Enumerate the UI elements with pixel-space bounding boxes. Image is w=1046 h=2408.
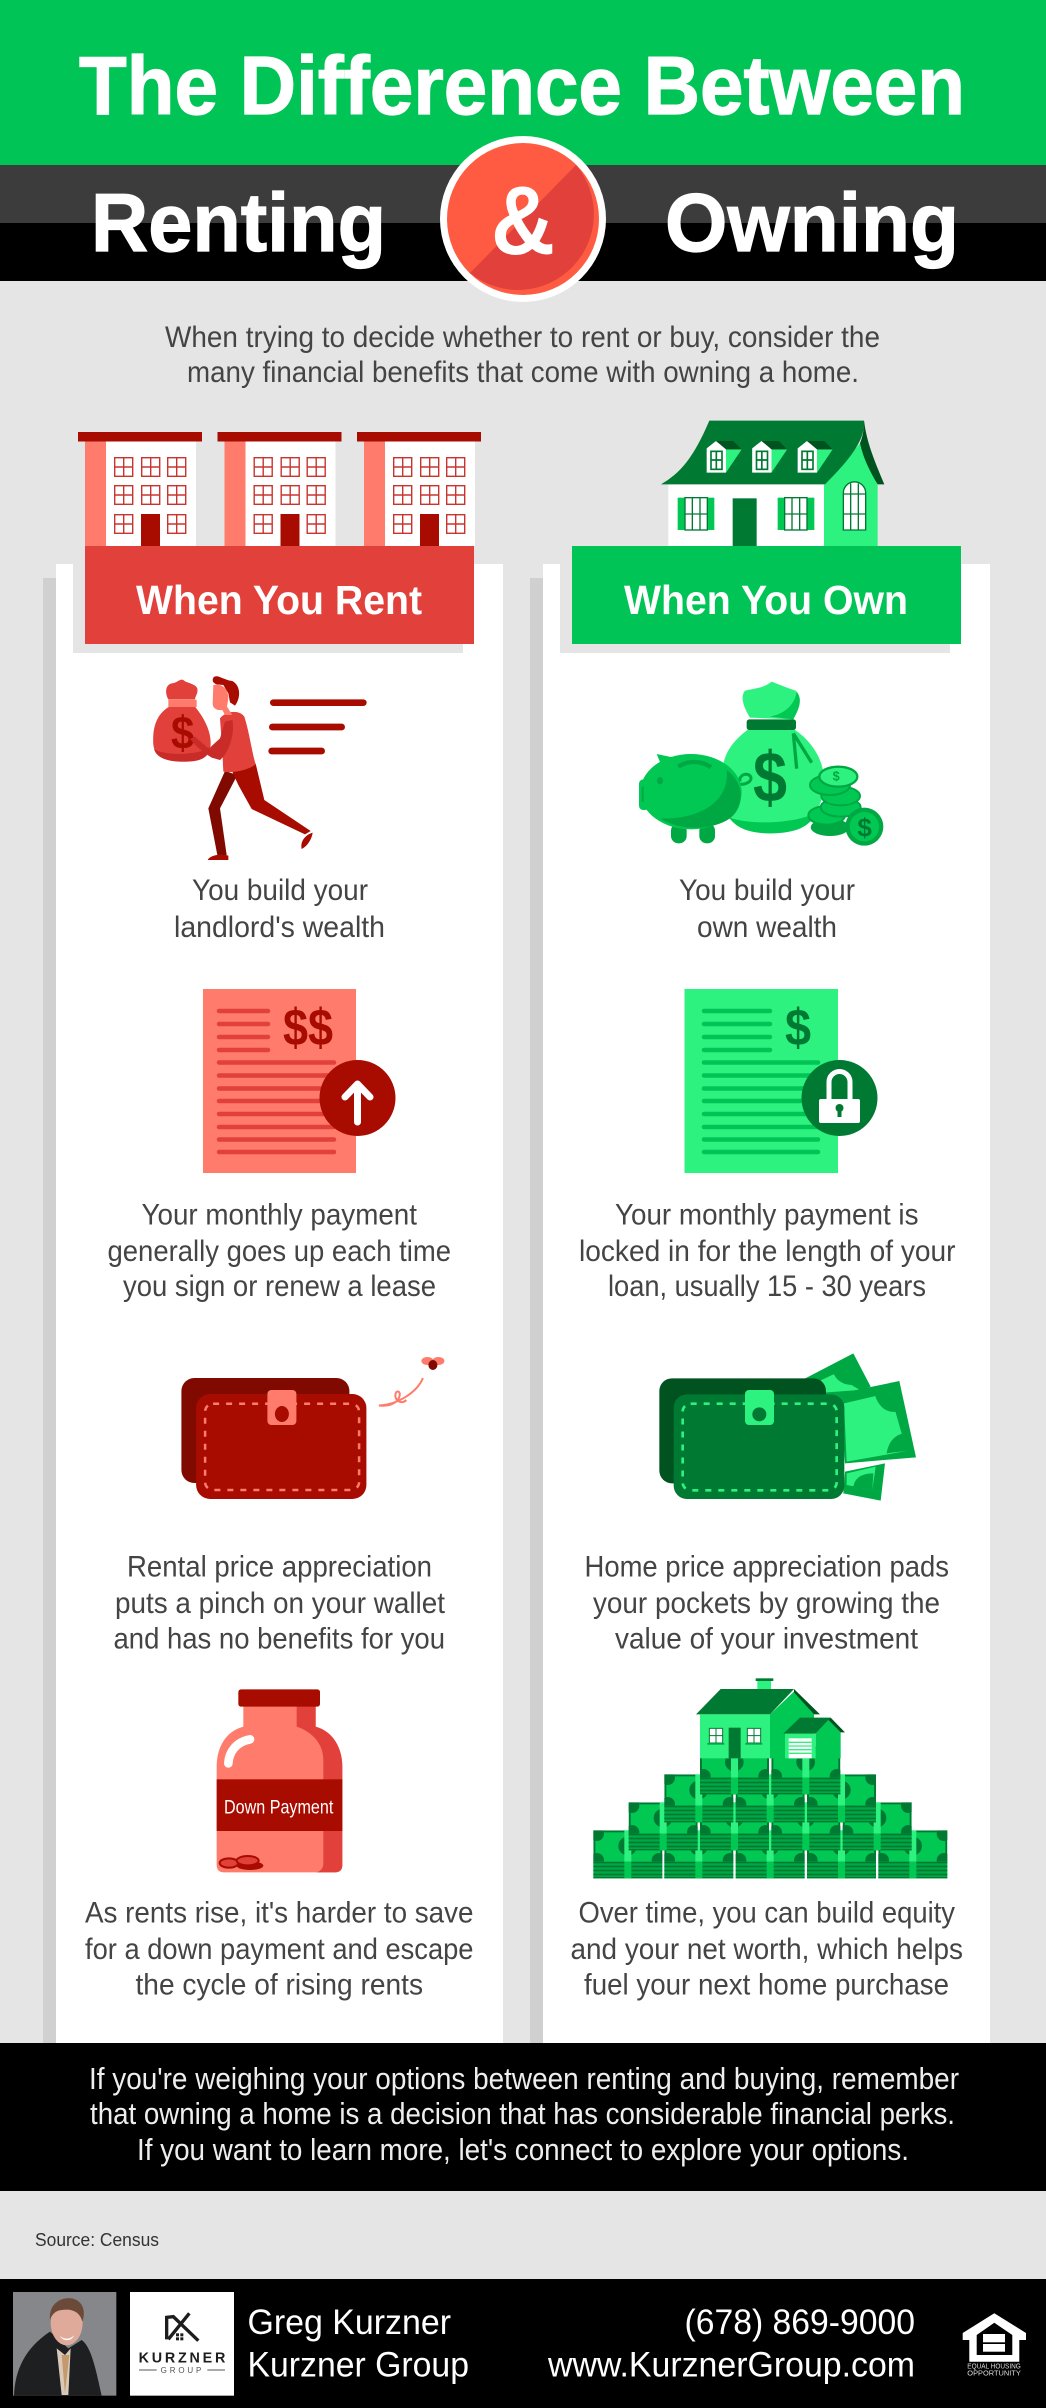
text: you build your landlord's wealth: landlord's wealth xyxy=(174,911,385,944)
ampersand badge: & xyxy=(491,166,555,275)
icon: piggy bank and money bag: $ xyxy=(753,738,787,818)
text: monthly payment locked in: Your monthly payment is xyxy=(615,1198,918,1232)
text: monthly payment locked in: locked in for the length of your xyxy=(579,1235,956,1268)
company logo: GROUP xyxy=(161,2366,201,2375)
icon: own document with lock xyxy=(684,989,878,1173)
text: build equity xyxy=(570,1896,963,2002)
footer bar xyxy=(0,2279,1046,2408)
icon: rent document with arrow xyxy=(203,989,396,1173)
icon: rent document with arrow: $$ xyxy=(283,999,333,1057)
closing message panel: If you want to learn more, let's connect to explore your options. xyxy=(137,2132,909,2167)
icon: equal housing opportunity: OPPORTUNITY xyxy=(967,2368,1021,2378)
icon: empty red wallet xyxy=(181,1357,444,1499)
text: rental price appreciation: Rental price appreciation xyxy=(127,1550,432,1584)
closing message panel: that owning a home is a decision that has considerable financial perks. xyxy=(90,2096,955,2131)
text: build equity: fuel your next home purchase xyxy=(584,1968,949,2002)
text: you build your landlord's wealth xyxy=(174,874,385,944)
text: harder to save xyxy=(85,1896,474,2002)
text: monthly payment goes up: Your monthly payment xyxy=(142,1198,418,1232)
text: home price appreciation: your pockets by growing the xyxy=(593,1587,940,1620)
contact details: www.KurznerGroup.com xyxy=(547,2346,915,2384)
icon: man carrying money bag: $ xyxy=(171,706,194,758)
text: harder to save: for a down payment and escape xyxy=(85,1933,474,1966)
agent name xyxy=(248,2303,469,2384)
agent name: Greg Kurzner xyxy=(248,2303,451,2342)
icon: house xyxy=(661,421,884,547)
icon: down payment jar: Down Payment xyxy=(224,1797,334,1818)
icon: down payment jar xyxy=(217,1689,342,1872)
panel: when you own xyxy=(530,564,990,2043)
text: you build your own wealth xyxy=(679,874,855,944)
title: Renting: Renting xyxy=(91,176,386,269)
agent photo xyxy=(13,2292,116,2396)
icon: equal housing opportunity xyxy=(963,2313,1026,2378)
text: build equity: and your net worth, which helps xyxy=(570,1933,963,1966)
ampersand badge xyxy=(440,136,606,302)
header: when you own xyxy=(560,546,961,653)
contact details xyxy=(547,2303,915,2384)
closing message panel xyxy=(0,2043,1046,2191)
text: home price appreciation: Home price appreciation pads xyxy=(584,1550,949,1584)
agent name: Kurzner Group xyxy=(248,2346,469,2384)
contact details: (678) 869-9000 xyxy=(684,2303,915,2342)
text: you build your landlord's wealth: You build your xyxy=(192,874,368,907)
icon: piggy bank and money bag: $ xyxy=(857,813,872,843)
company logo: KURZNER xyxy=(139,2350,226,2366)
text: monthly payment locked in xyxy=(579,1198,956,1303)
source note: Source: Census xyxy=(35,2230,159,2250)
text: monthly payment goes up: you sign or renew a lease xyxy=(123,1270,436,1303)
icon: apartment buildings xyxy=(78,432,481,546)
title: Owning: Owning xyxy=(665,176,959,269)
text: monthly payment goes up: generally goes up each time xyxy=(108,1235,451,1268)
text: build equity: Over time, you can build equity xyxy=(578,1896,955,1930)
header: when you rent xyxy=(73,546,474,653)
icon: green wallet with cash xyxy=(659,1353,916,1501)
text: rental price appreciation: puts a pinch on your wallet xyxy=(115,1587,446,1620)
text: home price appreciation xyxy=(584,1550,949,1656)
icon: house on a pile of money xyxy=(589,1678,951,1878)
text: you build your own wealth: You build your xyxy=(679,874,855,907)
intro text: many financial benefits that come with owning a home. xyxy=(187,356,859,389)
title band xyxy=(0,0,1046,281)
header: when you own: When You Own xyxy=(624,577,908,623)
icon: man carrying money bag xyxy=(153,676,363,860)
text: monthly payment goes up xyxy=(108,1198,451,1303)
icon: piggy bank and money bag: $ xyxy=(833,770,840,784)
icon: piggy bank and money bag xyxy=(639,682,883,846)
intro text: When trying to decide whether to rent or buy, consider the xyxy=(165,321,880,354)
text: rental price appreciation xyxy=(114,1550,446,1656)
text: harder to save: As rents rise, it's harder to save xyxy=(85,1896,474,1930)
text: you build your own wealth: own wealth xyxy=(697,911,837,944)
text: home price appreciation: value of your investment xyxy=(615,1622,919,1656)
closing message panel: If you're weighing your options between renting and buying, remember xyxy=(89,2061,959,2096)
text: harder to save: the cycle of rising rents xyxy=(136,1968,423,2002)
title: first line: The Difference Between xyxy=(79,39,965,132)
panel: when you rent xyxy=(43,564,503,2043)
company logo xyxy=(130,2292,234,2396)
icon: equal housing opportunity: EQUAL HOUSING xyxy=(967,2362,1021,2370)
text: rental price appreciation: and has no benefits for you xyxy=(114,1622,445,1656)
header: when you rent: When You Rent xyxy=(136,577,422,623)
icon: own document with lock: $ xyxy=(785,999,811,1057)
text: monthly payment locked in: loan, usually 15 - 30 years xyxy=(608,1270,926,1303)
intro text xyxy=(165,321,880,389)
